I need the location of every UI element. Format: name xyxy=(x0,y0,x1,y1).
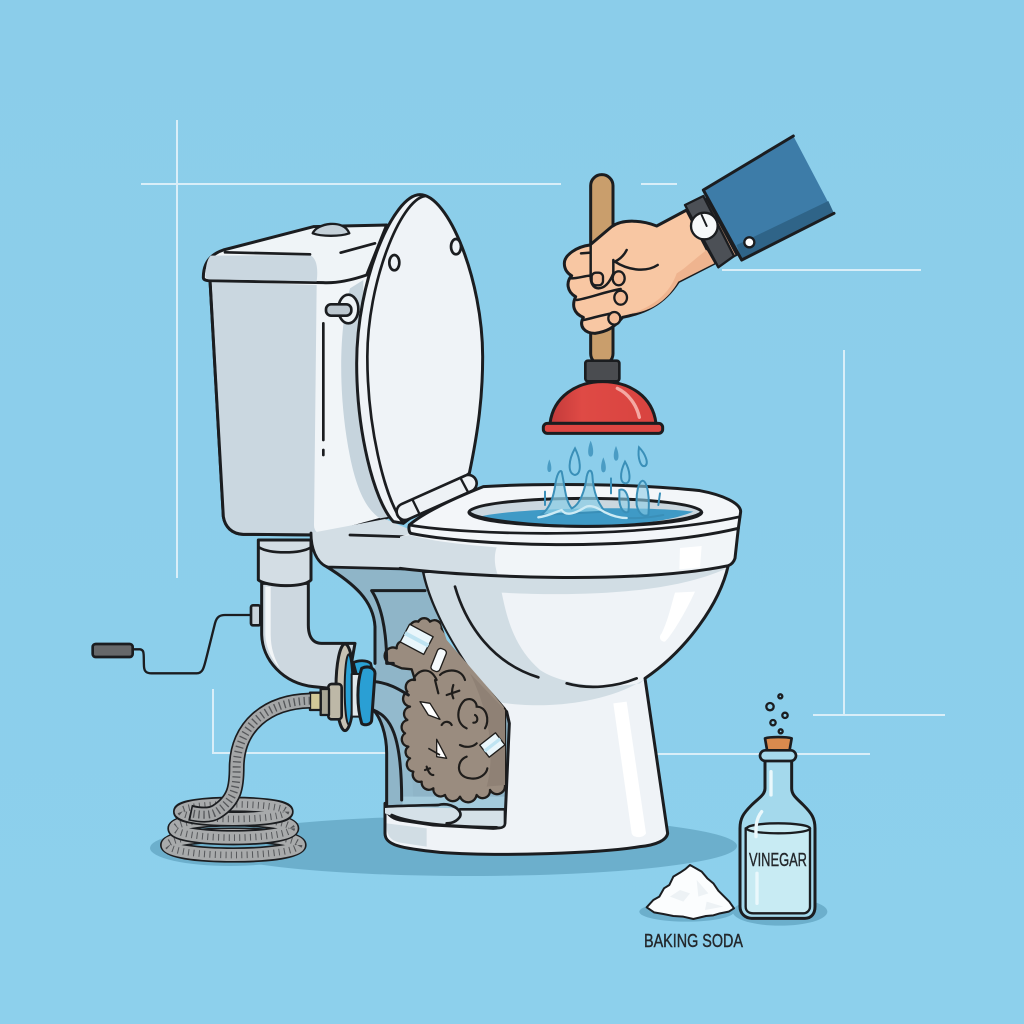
toilet tank xyxy=(203,224,390,535)
baking soda pile xyxy=(647,865,734,919)
plunger and hand group xyxy=(543,136,834,433)
toilet seat and water xyxy=(409,485,741,545)
bowl base trap xyxy=(385,804,505,828)
illustration: toilet unclogging scene xyxy=(91,120,945,948)
bowl body xyxy=(385,565,728,854)
hinge xyxy=(405,478,468,515)
wristwatch xyxy=(685,196,734,267)
flush lever xyxy=(323,295,358,455)
clog mass xyxy=(385,618,505,802)
toilet bowl and pedestal xyxy=(385,528,738,854)
drain pipe and hose assembly xyxy=(93,540,508,810)
tank lid xyxy=(203,224,387,283)
cutaway channel background xyxy=(327,567,508,810)
water splash and drops xyxy=(538,441,663,518)
raised toilet lid xyxy=(357,195,483,523)
item shadows xyxy=(639,898,827,926)
wire pull handle xyxy=(93,605,260,673)
plunger collar xyxy=(585,361,619,381)
paper scraps xyxy=(400,624,505,758)
elbow pipe xyxy=(258,540,355,690)
clog and cutaway detail xyxy=(327,567,505,828)
plunger handle xyxy=(591,175,613,365)
hand xyxy=(564,210,714,333)
channel outlines xyxy=(327,567,425,807)
toilet deck xyxy=(311,519,425,569)
rim band xyxy=(400,528,738,577)
bowl shading xyxy=(425,568,727,705)
baking soda label: BAKING SODA xyxy=(644,930,744,951)
vinegar bottle and baking soda xyxy=(639,694,827,926)
floor shadow xyxy=(150,816,737,876)
vinegar label: VINEGAR xyxy=(749,849,807,870)
brass fitting and drain snake xyxy=(168,684,342,855)
vinegar bubbles xyxy=(766,694,788,733)
pipe coupling xyxy=(336,644,375,731)
bottle xyxy=(740,737,815,918)
fitting xyxy=(310,684,342,719)
coiled drain snake xyxy=(168,701,310,855)
shirt sleeve xyxy=(702,136,834,260)
plunger cup xyxy=(543,382,663,433)
